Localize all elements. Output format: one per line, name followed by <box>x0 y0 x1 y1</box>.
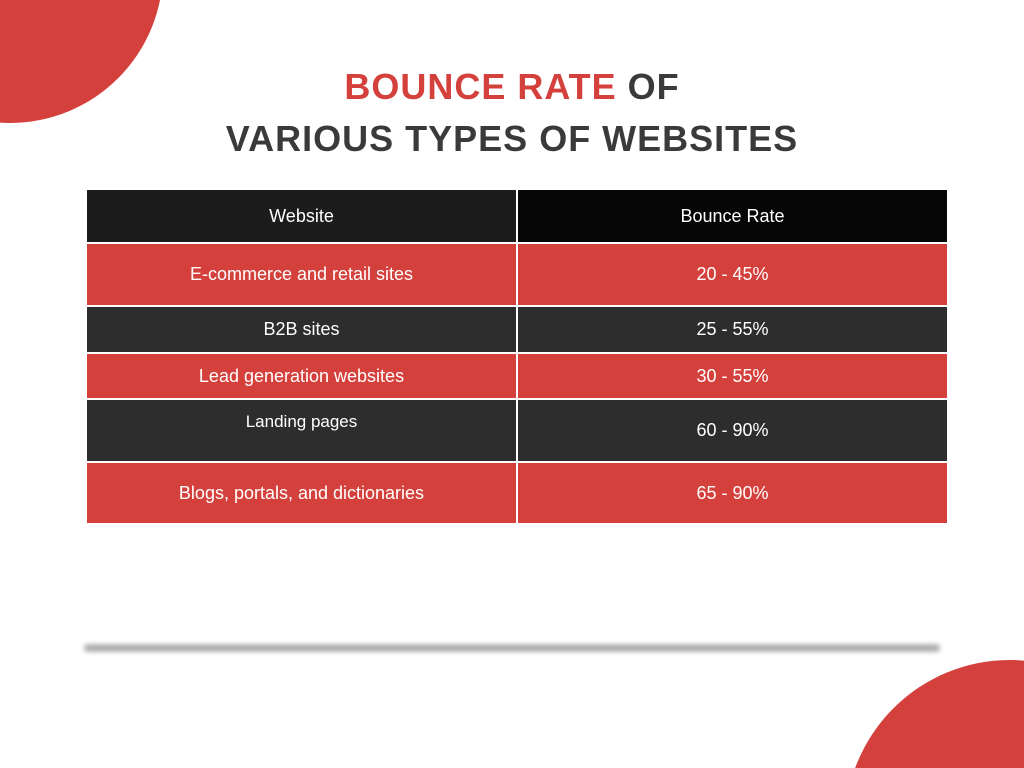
header row: Bounce Rate <box>680 206 785 226</box>
table <box>87 190 947 523</box>
row: e-commerce: 20 - 45% <box>696 264 769 284</box>
row: blogs: Blogs, portals, and dictionaries <box>179 482 424 502</box>
row: landing pages: 60 - 90% <box>696 420 769 440</box>
row: blogs <box>87 463 947 523</box>
row: landing pages <box>87 400 947 461</box>
title: BOUNCE RATE OF <box>344 66 680 107</box>
header row: Website <box>269 206 334 226</box>
title: VARIOUS TYPES OF WEBSITES <box>226 118 798 159</box>
header row <box>87 190 947 242</box>
row: e-commerce <box>87 244 947 305</box>
row: landing pages: Landing pages <box>246 412 357 431</box>
row: e-commerce: E-commerce and retail sites <box>190 264 413 284</box>
row: lead generation <box>87 354 947 398</box>
shadow bar <box>84 644 940 652</box>
row: lead generation: Lead generation websites <box>199 366 404 386</box>
title <box>226 66 798 159</box>
row: B2B: 25 - 55% <box>696 319 769 339</box>
row: B2B <box>87 307 947 352</box>
row: blogs: 65 - 90% <box>696 482 769 502</box>
row: B2B: B2B sites <box>263 319 340 339</box>
row: lead generation: 30 - 55% <box>696 366 769 386</box>
